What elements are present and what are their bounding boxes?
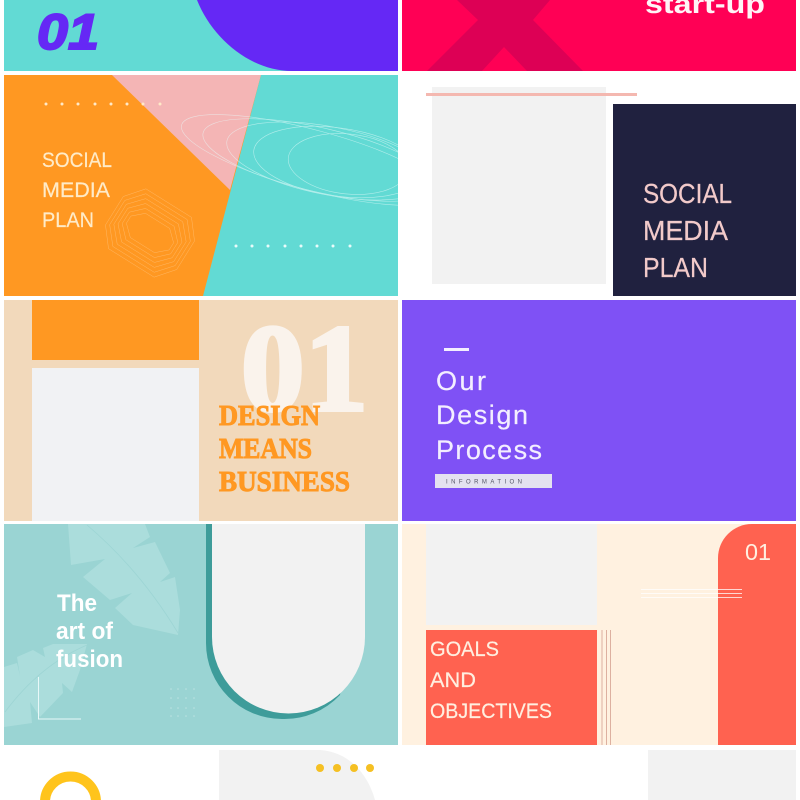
pink triangle — [112, 75, 261, 190]
panel: teal slide with number 01 — [4, 0, 398, 71]
heading social media plan: SOCIAL — [42, 148, 112, 172]
teal polygon — [203, 75, 398, 296]
octagon line art — [105, 188, 195, 278]
red rounded column — [718, 524, 796, 745]
purple curved shape — [197, 0, 398, 71]
heading our design process: Design — [436, 400, 528, 430]
horizontal triple lines — [641, 590, 742, 598]
heading design means business: DESIGN — [219, 400, 320, 432]
heading social media plan: MEDIA — [42, 178, 111, 202]
heading the art of fusion: The — [57, 590, 97, 617]
image placeholder — [432, 87, 606, 284]
panel: the art of fusion — [4, 524, 398, 745]
panel: goals and objectives — [402, 524, 796, 745]
large leaf — [68, 524, 180, 635]
heading goals and objectives: GOALS — [430, 638, 499, 661]
navy card — [613, 104, 796, 296]
top dotted row — [44, 102, 162, 106]
small leaf — [4, 644, 87, 727]
number 01: 01 — [37, 4, 99, 60]
bottom dotted row — [234, 244, 352, 248]
orbit line art — [181, 114, 398, 206]
heading our design process: Our — [436, 366, 486, 396]
heading the art of fusion: fusion — [56, 646, 123, 673]
panel: white slide with gray block — [648, 750, 796, 800]
red title block — [426, 630, 597, 745]
image placeholder — [426, 524, 597, 625]
dark arch shadow — [206, 524, 340, 719]
panel: orange and teal social media plan — [4, 75, 398, 296]
panel: design means business — [4, 300, 398, 521]
gray curved shape — [219, 750, 375, 800]
corner bracket — [38, 677, 81, 719]
large number 01: 01 — [241, 300, 368, 437]
heading social media plan: PLAN — [42, 208, 94, 232]
panel: white slide with navy card — [426, 87, 796, 296]
heading our design process: Process — [436, 435, 542, 465]
heading our design process — [436, 366, 542, 465]
image placeholder — [32, 368, 199, 521]
number 01: 01 — [745, 539, 771, 565]
heading social media plan: SOCIAL — [643, 178, 732, 209]
heading the art of fusion: art of — [56, 618, 114, 645]
heading goals and objectives: OBJECTIVES — [430, 700, 552, 723]
vertical triple lines — [602, 630, 610, 745]
heading design means business — [219, 400, 350, 498]
heading design means business: MEANS — [219, 433, 312, 465]
heading design means business: BUSINESS — [219, 466, 350, 498]
orange block — [32, 300, 199, 360]
dot grid — [170, 688, 195, 717]
dark X shape — [427, 0, 583, 71]
information tag — [435, 474, 552, 488]
heading social media plan: PLAN — [643, 252, 708, 283]
heading social media plan — [643, 178, 732, 283]
heading goals and objectives — [430, 638, 552, 723]
yellow dots — [316, 764, 374, 772]
information tag: INFORMATION — [446, 480, 522, 486]
panel: red start-up slide — [402, 0, 796, 71]
light arch placeholder — [212, 524, 365, 713]
short rule — [444, 348, 469, 351]
panel: white slide with yellow ring — [45, 750, 375, 800]
yellow ring — [45, 776, 96, 800]
panel: our design process — [402, 300, 796, 521]
heading the art of fusion — [56, 594, 122, 667]
heading social media plan: MEDIA — [643, 215, 729, 246]
heading goals and objectives: AND — [430, 669, 476, 692]
pink rule — [426, 93, 637, 96]
heading social media plan — [42, 152, 112, 228]
